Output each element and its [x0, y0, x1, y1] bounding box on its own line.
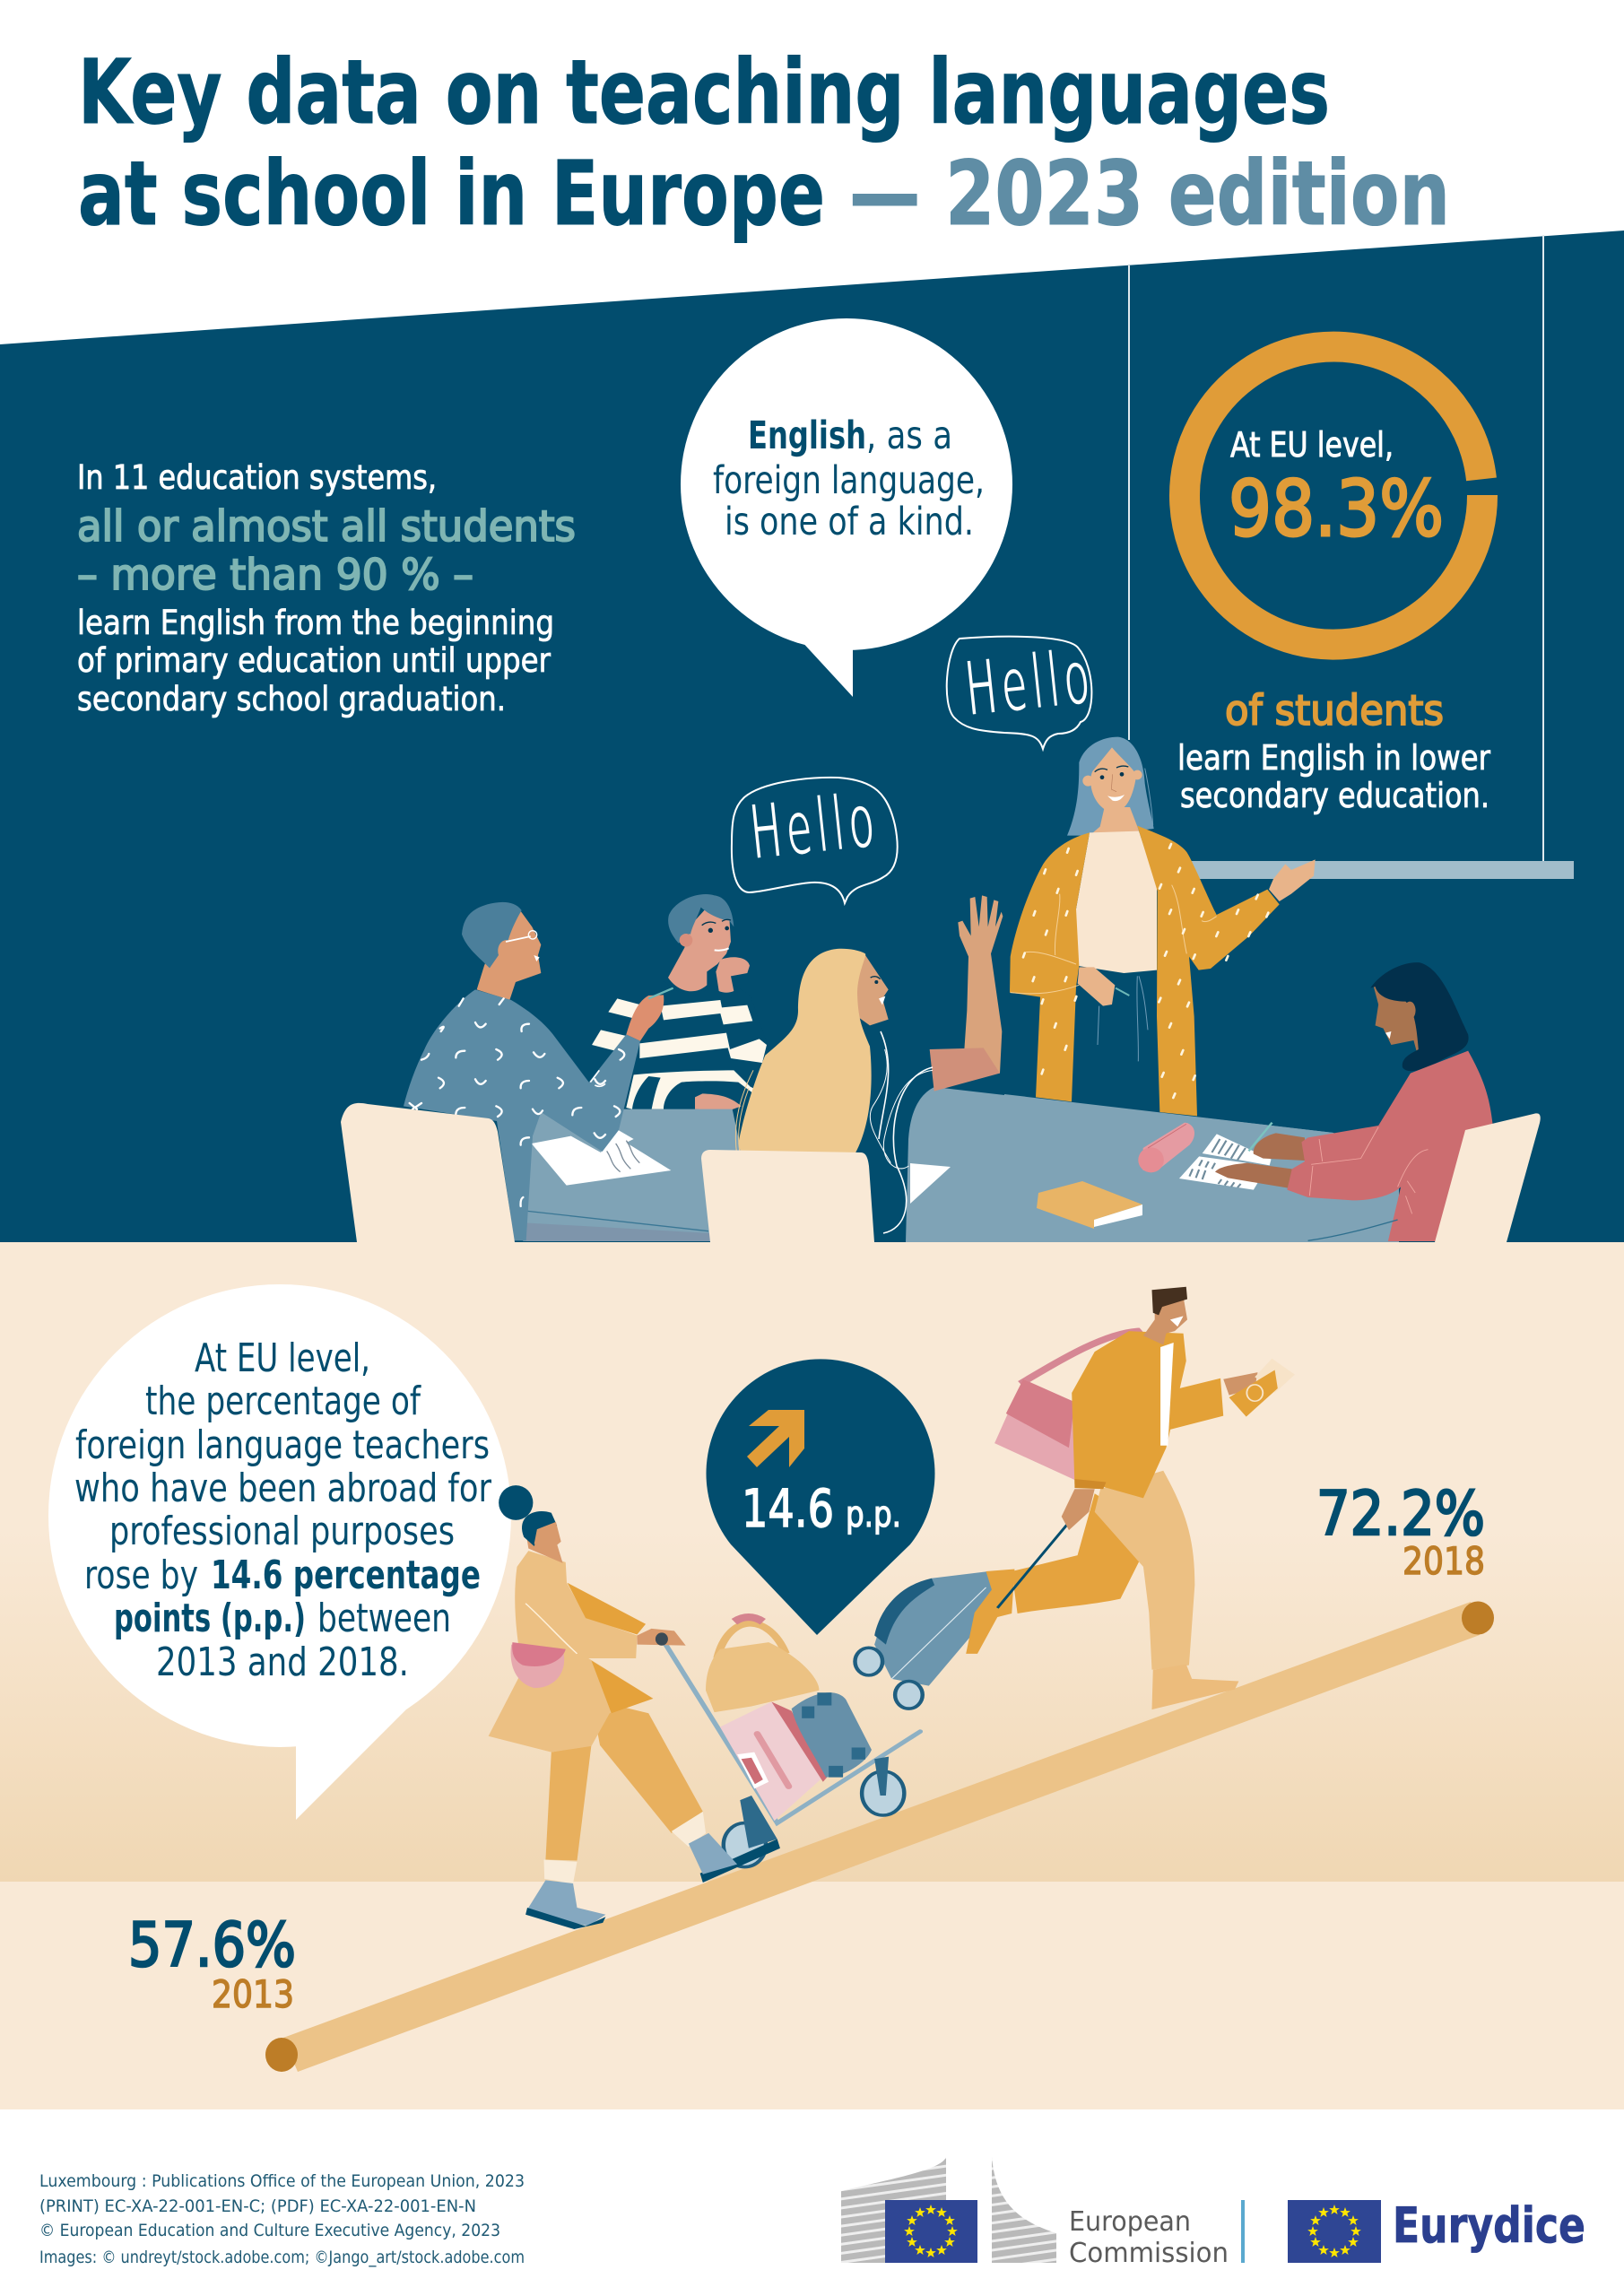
logo: Eurydice: [1288, 2197, 1585, 2263]
skin hands: [1254, 1133, 1305, 1161]
figure: traveller man running: [855, 1287, 1295, 1709]
callout: EU level teachers abroad: 2013 and 2018.: [156, 1639, 409, 1685]
legs: [545, 1745, 591, 1860]
boots: [528, 1880, 605, 1926]
logo: European Commission: Commission: [1069, 2238, 1229, 2269]
logo divider: [1241, 2200, 1245, 2263]
callout: EU level teachers abroad: [48, 1284, 511, 1820]
text block: of students learn English: of students: [1225, 686, 1444, 735]
callout: EU level teachers abroad: points (p.p.): [114, 1596, 306, 1641]
footer: credits: [39, 2171, 525, 2267]
table: right: [906, 1087, 1399, 1242]
callout: English speech bubble: is one of a kind.: [725, 500, 974, 544]
text block: English from primary to upper secondary: of primary education until upper: [77, 641, 551, 680]
board ledge: [1184, 861, 1574, 879]
bag: [1020, 1331, 1142, 1422]
logo: Eurydice: Eurydice: [1393, 2197, 1585, 2254]
paper on right table: [910, 1163, 951, 1204]
passport hand: [1223, 1372, 1257, 1396]
footer: credits: Luxembourg : Publications Office of the European Union, 2023: [39, 2171, 525, 2191]
stat: 72.2% in 2018: 72.2%: [1316, 1479, 1485, 1550]
stat: 57.6% in 2013: [128, 1910, 296, 2016]
text block: of students learn English: secondary education.: [1180, 776, 1489, 815]
jacket: [1072, 1331, 1186, 1498]
coat: [489, 1551, 653, 1752]
donut chart: 98.3%: [1185, 347, 1482, 645]
trolley wheels: [700, 1757, 904, 1883]
text block: English from primary to upper secondary: In 11 education systems,: [77, 458, 437, 497]
footer: credits: Images: © undreyt/stock.adobe.com; ©Jango_art/stock.adobe.com: [39, 2248, 525, 2267]
callout: English speech bubble: , as a: [866, 413, 952, 458]
head: [525, 1530, 563, 1563]
text block: English from primary to upper secondary: secondary school graduation.: [77, 680, 506, 718]
text block: of students learn English: learn English in lower: [1177, 738, 1490, 778]
title: [78, 41, 1450, 246]
donut chart: 98.3%: 98.3%: [1229, 465, 1444, 554]
callout: EU level teachers abroad: At EU level,: [195, 1335, 370, 1381]
footer: credits: © European Education and Culture Executive Agency, 2023: [39, 2221, 500, 2240]
papers: [1179, 1134, 1271, 1190]
chair: middle: [701, 1150, 874, 1242]
panel: navy classroom background: [0, 230, 1624, 1242]
logo: European Commission: [841, 2157, 1229, 2269]
pencil case: [1138, 1123, 1194, 1172]
title: — 2023 edition: [849, 143, 1450, 246]
footer: credits: (PRINT) EC-XA-22-001-EN-C; (PDF) EC-XA-22-001-EN-N: [39, 2196, 476, 2216]
front leg: [1095, 1471, 1194, 1670]
speech bubble: Hello (student): [732, 778, 898, 903]
trolley frame: [663, 1640, 920, 1823]
stat: 72.2% in 2018: 2018: [1403, 1539, 1485, 1583]
arrow up: [747, 1410, 804, 1467]
hair: [1370, 962, 1469, 1071]
donut chart: 98.3%: At EU level,: [1230, 425, 1394, 465]
purse: [511, 1645, 564, 1688]
text block: English from primary to upper secondary: – more than 90 % –: [77, 551, 473, 600]
callout: EU level teachers abroad: foreign language teachers: [75, 1422, 490, 1468]
head: [1143, 1297, 1187, 1344]
map pin: 14.6 p.p.: 14.6: [742, 1478, 834, 1539]
logo: European Commission: European: [1069, 2206, 1191, 2238]
book: [1037, 1181, 1142, 1229]
callout: EU level teachers abroad: 14.6 percentage: [211, 1552, 481, 1598]
hair strands on table: [879, 1031, 933, 1233]
map pin: 14.6 p.p.: [707, 1359, 934, 1635]
yellow bag: [706, 1617, 819, 1712]
callout: EU level teachers abroad: rose by: [84, 1552, 198, 1598]
text block: English from primary to upper secondary: all or almost all students: [77, 502, 576, 552]
callout: EU level teachers abroad: the percentage of: [145, 1378, 421, 1424]
figure: blonde student: [735, 895, 1003, 1169]
callout: English speech bubble: English: [748, 413, 866, 458]
text block: English from primary to upper secondary: learn English from the beginning: [77, 604, 554, 642]
figure: student with stripes: [592, 894, 769, 1111]
callout: EU level teachers abroad: who have been abroad for: [74, 1465, 492, 1511]
panel: peach travel background: [0, 1242, 1624, 2109]
speech bubble: Hello (student): Hello: [746, 778, 878, 878]
stat: 57.6% in 2013: 2013: [212, 1972, 294, 2016]
table mask in front of teacher: [1004, 1094, 1399, 1242]
paper on left table: [532, 1128, 671, 1186]
face/neck: [1374, 987, 1443, 1058]
stat: 57.6% in 2013: 57.6%: [128, 1910, 296, 1981]
text block: of students learn English: [1177, 686, 1490, 815]
sweater: [1287, 1051, 1494, 1241]
back leg: [1012, 1493, 1155, 1613]
speech bubble: Hello (teacher): Hello: [961, 634, 1093, 735]
figure: man with glasses: [404, 902, 673, 1240]
callout: EU level teachers abroad: professional purposes: [109, 1509, 455, 1554]
callout: EU level teachers abroad: between: [317, 1596, 451, 1641]
pink suitcase: [720, 1701, 827, 1821]
text block: English from primary to upper secondary: [77, 458, 576, 718]
chair: left: [341, 1103, 515, 1242]
callout: English speech bubble: [681, 318, 1012, 697]
table: left: [523, 1109, 742, 1241]
face: [668, 906, 731, 991]
stat: 72.2% in 2018: [1316, 1479, 1485, 1583]
hand: [637, 1629, 686, 1646]
blue suitcase: [792, 1692, 872, 1778]
board frame lines: [1129, 235, 1543, 863]
rolling suitcase: [855, 1571, 996, 1709]
hand lower: [1062, 1489, 1095, 1530]
figure: traveller woman with trolley: [489, 1485, 920, 1929]
figure: woman in pink, writing: [1138, 962, 1494, 1241]
callout: English speech bubble: foreign language,: [713, 458, 985, 503]
chair: right: [1435, 1113, 1541, 1242]
map pin: 14.6 p.p.: p.p.: [846, 1494, 901, 1535]
title: at school in Europe: [78, 143, 825, 246]
ramp: [265, 1602, 1494, 2072]
figure: teacher: [1010, 737, 1316, 1116]
